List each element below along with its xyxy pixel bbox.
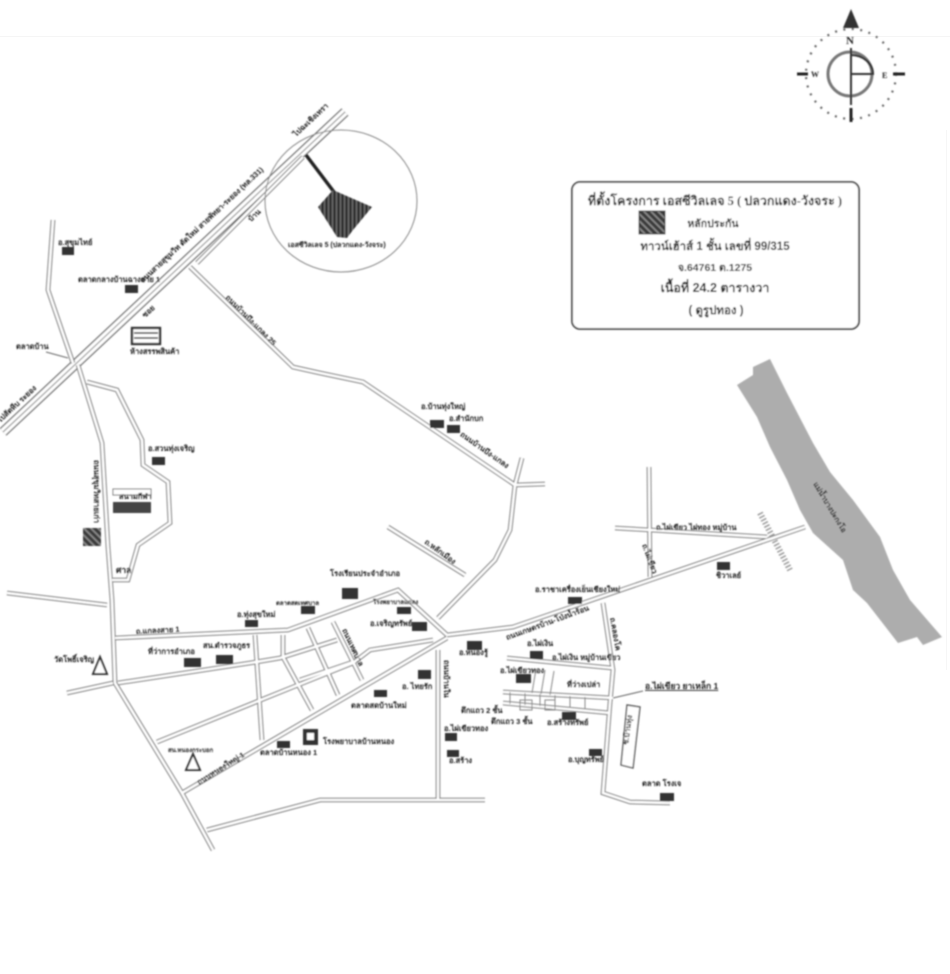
landmark: mid village <box>527 638 620 663</box>
landmark: northeast town <box>372 598 418 614</box>
legend box <box>572 182 859 329</box>
west tick and east tick and south tick <box>797 74 905 122</box>
khlong road label: ถ.คลองโค <box>608 617 624 651</box>
landmark: highlighted village <box>613 679 719 698</box>
landmark: small shrine: ศาล <box>116 565 131 575</box>
landmark: bottom right market <box>642 778 681 801</box>
note: ( ดูรูปทอง ) <box>688 304 744 318</box>
landmark: temple school: ตลาดกลางบ้านฉางสาย 1 <box>78 275 160 284</box>
landmark: school south <box>303 729 395 746</box>
landmark: government building: สนามกีฬา <box>119 492 152 501</box>
landmark: town pair <box>148 641 251 667</box>
landmarks <box>16 237 741 801</box>
to Chonburi label: ไปฉะเชิงเทรา <box>290 101 330 139</box>
inner globe <box>828 52 872 96</box>
landmark: town pair: สน.ตำรวจภูธร <box>203 641 251 651</box>
legend title: ที่ตั้งโครงการ เอสซีวิลเลจ 5 ( ปลวกแดง-วังจระ ) <box>588 191 842 208</box>
landmark: south village <box>547 712 588 727</box>
landmark: hospital building: ห้างสรรพสินค้า <box>130 347 179 356</box>
landmark: village central: อ.ทุ่งสุขใหม่ <box>237 610 276 619</box>
landmark: thai village <box>402 670 433 691</box>
vertical west road label: ถนนสุขุมวิทสายเก่า <box>92 460 101 523</box>
landmark: small label <box>276 600 319 614</box>
road inner fill <box>7 157 805 850</box>
east main road label: ถนนเกษตรบ้าน-โป่งน้ำร้อน <box>504 601 591 642</box>
landmark: school north <box>329 568 400 599</box>
landmark: temple school <box>78 275 160 293</box>
landmark: phase label: ที่ว่างเปล่า <box>567 678 600 689</box>
north arrow <box>843 9 859 28</box>
landmark: townhouse labels: ตึกแถว 2 ชั้น <box>461 704 503 715</box>
landmark: school south: โรงพยาบาลบ้านหนอง <box>322 736 395 746</box>
compass rose <box>797 9 905 122</box>
landmark: school north: โรงเรียนประจำอำเภอ <box>329 568 400 578</box>
railway crossing <box>760 513 790 570</box>
landmark: village south <box>260 741 317 757</box>
ban phai road label: ถ.ไผ่เขียว <box>640 542 660 575</box>
landmark: townhouse labels: ตึกแถว 3 ชั้น <box>491 715 533 726</box>
landmark: government building <box>113 489 152 513</box>
landmark: hatched project marker <box>83 528 101 546</box>
landmark: market label: ตลาดบ้าน <box>16 342 50 351</box>
direction W: W <box>811 70 819 79</box>
highway <box>3 112 345 432</box>
frontage road and minor roads casing <box>7 157 805 850</box>
project locator circle <box>265 130 417 272</box>
landmark: town pair: ที่ว่าการอำเภอ <box>148 645 195 656</box>
lak mueang road label: ถ.หลักเมือง <box>423 537 458 566</box>
river name: แม่น้ำบางปะกงโอ <box>811 479 850 534</box>
landmark: temple west: วัดโพธิ์เจริญ <box>54 653 95 664</box>
project site access road <box>306 155 334 192</box>
south road label: ถนนบ้านบึง-แกลง <box>458 430 511 470</box>
highway name: ถนนสายสุขุมวิท ตัดใหม่ สายพัทยา-ระยอง (ทล.331) <box>138 165 266 284</box>
landmark: south village: อ.สร้างทรัพย์ <box>547 718 588 727</box>
project site plot <box>318 190 372 238</box>
housing plots <box>510 669 585 710</box>
river <box>737 359 942 645</box>
landmark: central east: อ.หนองรู้ <box>459 648 489 658</box>
frontage label: ซอย <box>140 303 157 319</box>
landmark: loop village <box>148 444 195 465</box>
landmark: sub village: อ.ไผ่เขียวทอง <box>500 665 544 675</box>
landmark: thai village: อ. ไทยรัก <box>402 681 433 691</box>
landmark: temple south: สน.หนองกระบอก <box>168 747 214 754</box>
landmark: village town east: อ.เจริญทรัพย์ <box>370 619 412 628</box>
landmark: highlighted village: อ.ไผ่เขียว ยาเหล็ก 1 <box>645 679 719 691</box>
landmark: hospital building <box>130 328 179 356</box>
landmark: mid village: อ.ไผ่เงิน <box>527 638 554 648</box>
landmark: village north: อ.สุขุมไทย์ <box>58 237 92 247</box>
landmark: temple south <box>168 747 214 770</box>
northern frontage label: บ้าน <box>246 207 263 223</box>
landmark: village south: ตลาดบ้านหนอง 1 <box>260 748 317 757</box>
legend swatch <box>639 211 665 234</box>
landmark: village town east <box>370 619 427 631</box>
landmark: townhouse labels <box>461 704 533 726</box>
property description: ทาวน์เฮ้าส์ 1 ชั้น เลขที่ 99/315 <box>640 237 790 253</box>
lower town road label: ถนนหนองใหญ่ 1 <box>195 750 246 787</box>
landmark: village lower <box>568 749 604 764</box>
landmark: sub village <box>500 665 544 683</box>
P shaped meridian <box>851 48 873 105</box>
landmark: east road twin <box>421 402 484 433</box>
landmark: village north <box>58 237 92 255</box>
landmark: market road: อ.ราชาเครื่องเย็นเชียงใหม่ <box>535 583 620 594</box>
area: เนื้อที่ 24.2 ตารางวา <box>661 278 769 295</box>
landmark: village market <box>351 690 407 710</box>
road network <box>3 112 805 850</box>
landmark: market label <box>16 342 68 358</box>
landmark: east road twin: อ.บ้านทุ่งใหญ่ <box>421 402 466 411</box>
town road label: ถ.แกลงสาย 1 <box>136 625 180 636</box>
main vertical south label: ถนนบ้านใน <box>442 660 451 699</box>
landmark: northeast town: โรงพยาบาลแกลง <box>372 598 418 606</box>
landmark: village market: ตลาดสดบ้านใหม่ <box>351 701 407 710</box>
landmark: west of canal <box>444 723 488 741</box>
landmark: small label: ตลาดสดเทศบาล <box>276 600 319 607</box>
landmark: canal block label: ซ.บ้านทุ่ง <box>621 714 634 745</box>
landmark: temple west <box>54 653 107 674</box>
direction N: N <box>846 35 854 47</box>
landmark: east road twin: อ.สำนักบก <box>449 414 484 423</box>
landmark: market road <box>535 583 620 604</box>
landmark: loop village: อ.สวนทุ่งเจริญ <box>148 444 195 453</box>
landmark: far east village: ชิวาเลย์ <box>716 571 741 580</box>
landmark: mid village: อ.ไผ่เงิน หมู่บ้านเขียว <box>552 652 620 663</box>
collateral label: หลักประกัน <box>687 218 739 230</box>
landmark: village lower: อ.บุญทรัพย์ <box>568 755 604 764</box>
direction E: E <box>882 71 887 80</box>
landmark: small south <box>447 750 472 765</box>
highway and road labels <box>0 101 737 787</box>
deed numbers: จ.64761 ต.1275 <box>678 262 752 274</box>
landmark: small south: อ.สร้าง <box>449 756 472 765</box>
landmark: bottom right market: ตลาด โรงเจ <box>642 778 681 788</box>
canal block <box>621 705 640 768</box>
upper east road label: ถ.ไผ่เขียว ไผ่ทอง หมู่บ้าน <box>656 522 737 533</box>
landmark: village central <box>237 610 276 627</box>
central vertical label: ถนนเทศบาล <box>340 627 366 668</box>
landmark: far east village <box>716 562 741 580</box>
landmark: central east <box>459 641 489 658</box>
landmark: west of canal: อ.ไผ่เขียวทอง <box>444 723 488 733</box>
east road label: ถนนบ้านบึง-แกลง 25 <box>224 293 278 347</box>
project site name: เอสซีวิลเลจ 5 (ปลวกแดง-วังจระ) <box>288 241 386 249</box>
